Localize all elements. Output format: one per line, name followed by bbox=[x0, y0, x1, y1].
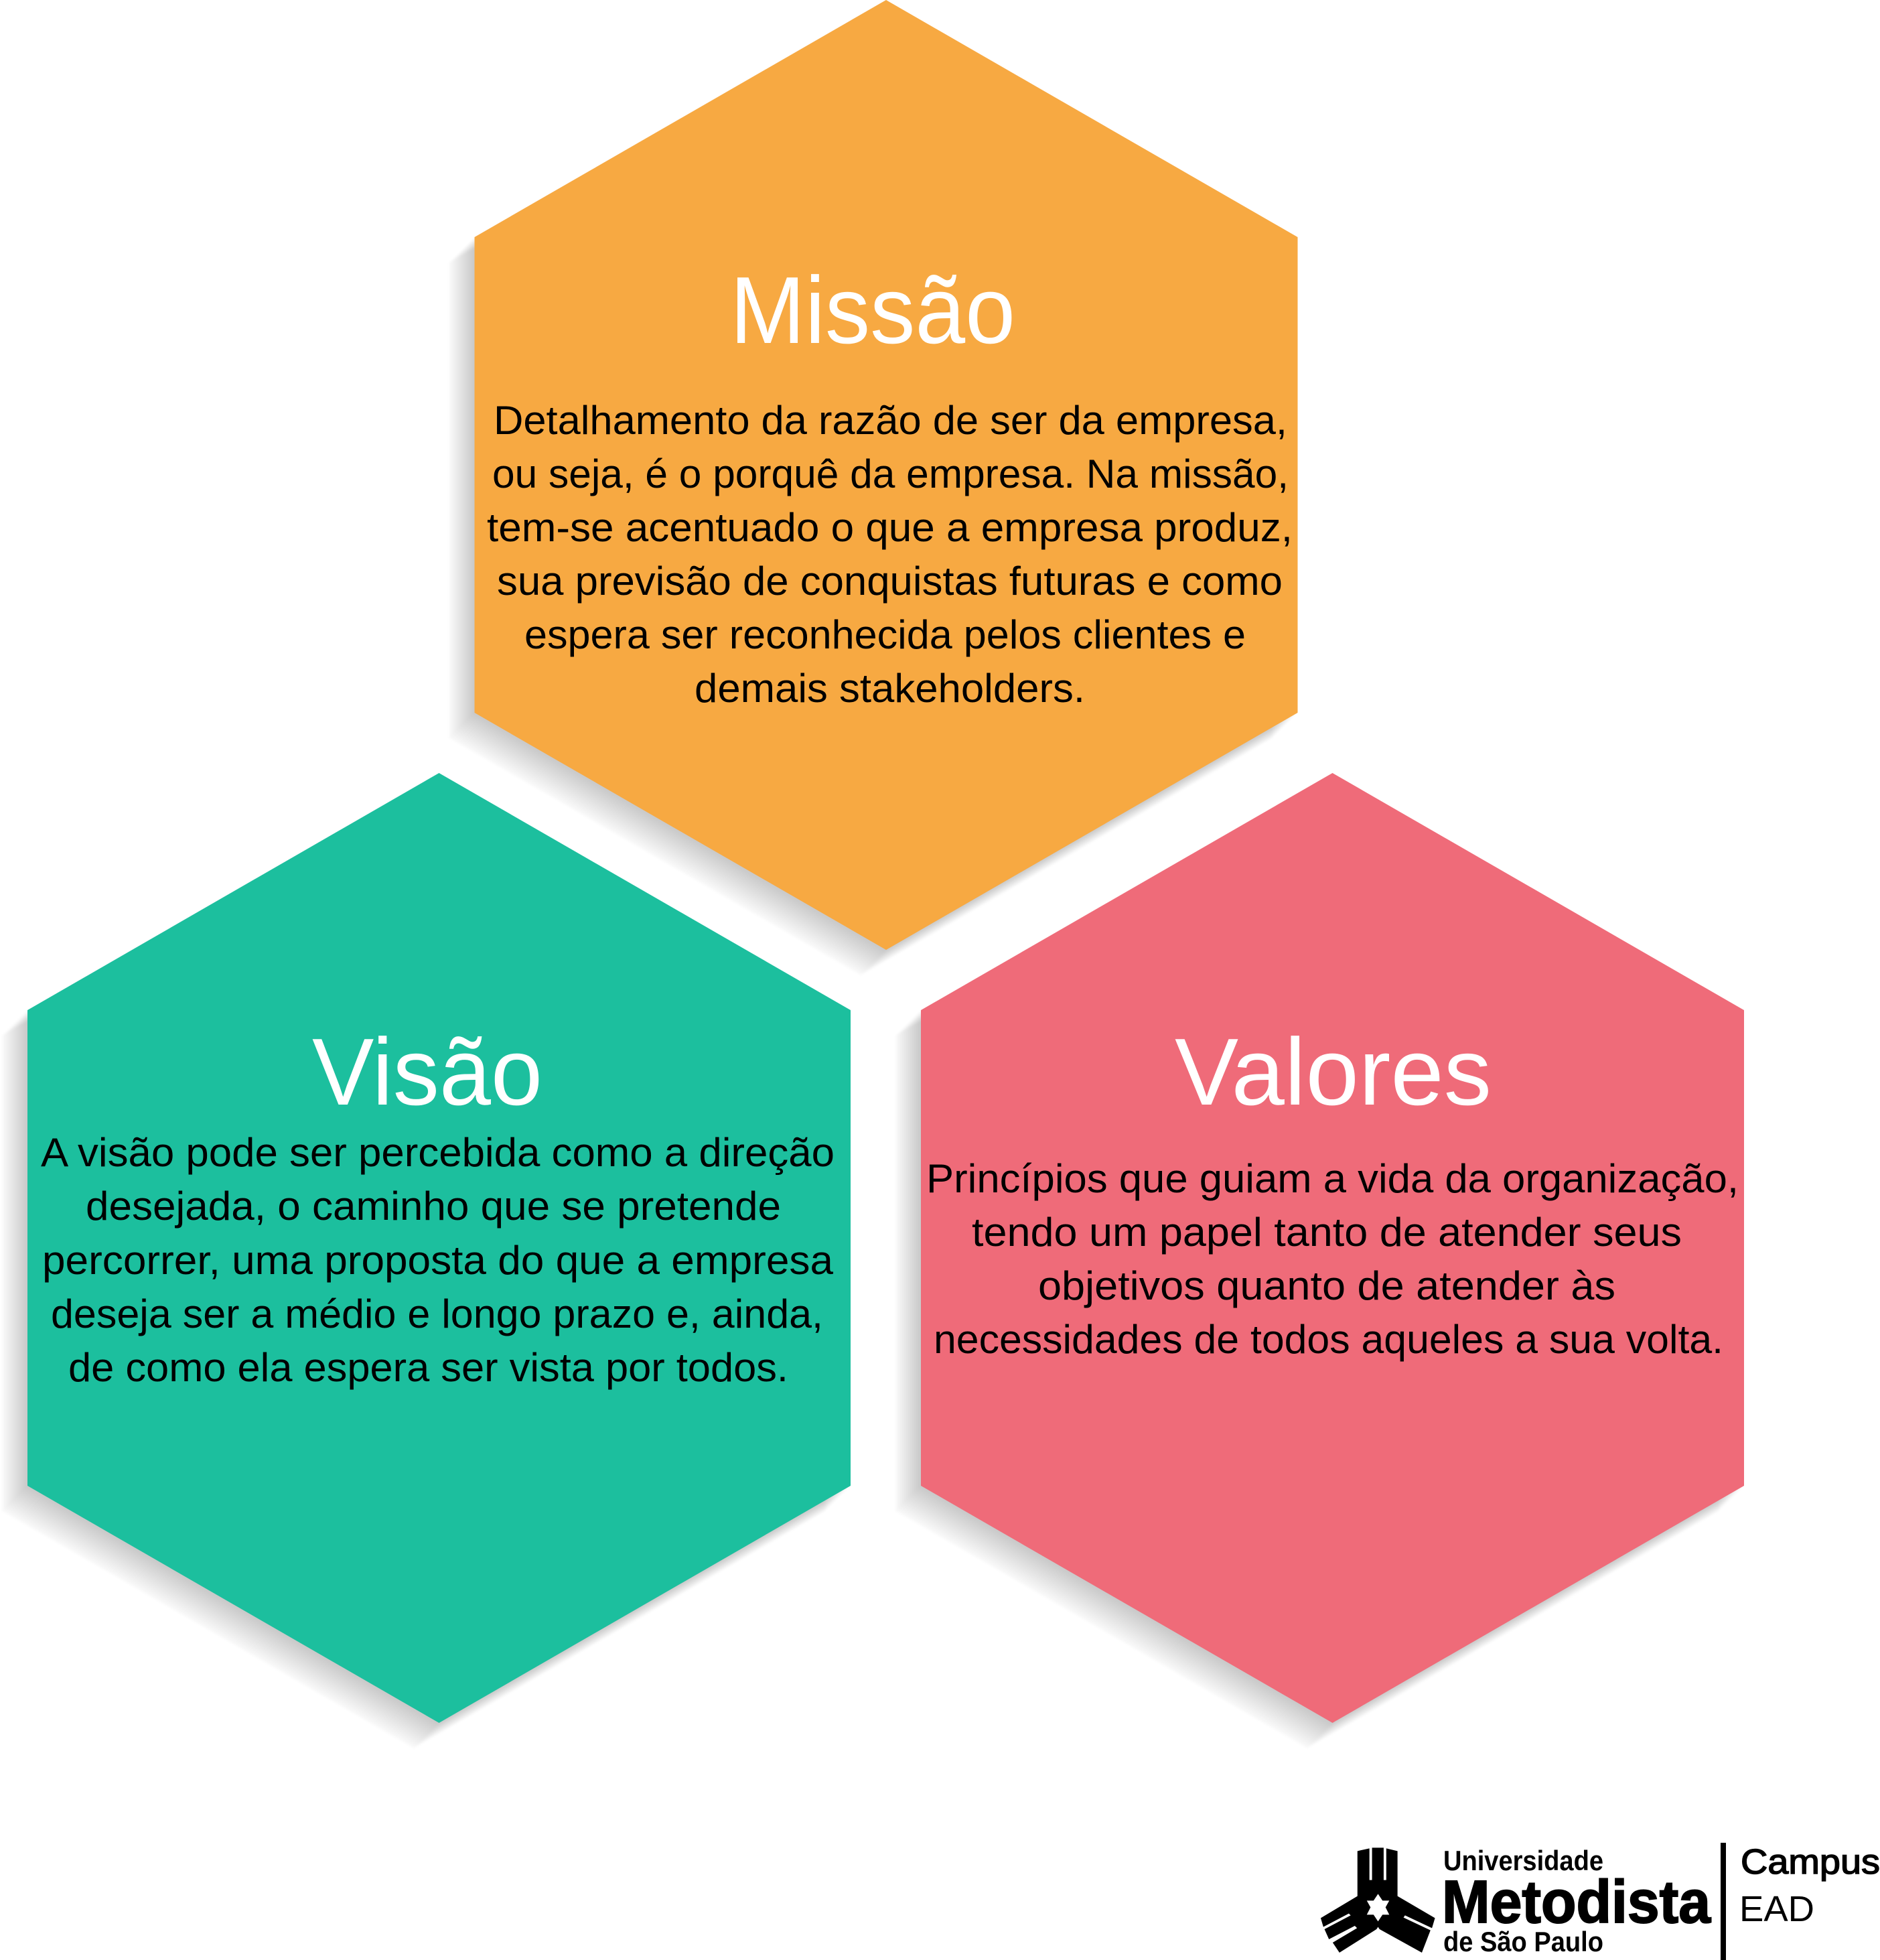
logo: Universidade Metodista de São Paulo, Campus EAD bbox=[1321, 1843, 1880, 1960]
text block: Visão description: desejada, o caminho que se pretende bbox=[86, 1184, 781, 1229]
text block: Valores description: Princípios que guiam a vida da organização, bbox=[926, 1156, 1739, 1201]
hexagon shape: orange bbox=[449, 0, 1298, 975]
text block: Missão description: ou seja, é o porquê da empresa. Na missão, bbox=[492, 451, 1289, 496]
panel: Visão hexagon bbox=[2, 773, 851, 1748]
text block: Valores description: necessidades de todos aqueles a sua volta. bbox=[934, 1317, 1723, 1362]
panel: Missão hexagon bbox=[449, 0, 1298, 975]
text block: Visão description: deseja ser a médio e longo prazo e, ainda, bbox=[51, 1291, 823, 1336]
text block: Missão description bbox=[487, 398, 1293, 711]
text block: Missão description: tem-se acentuado o que a empresa produz, bbox=[487, 505, 1293, 550]
text: Campus: Campus bbox=[1741, 1843, 1880, 1882]
divider bar bbox=[1721, 1843, 1726, 1960]
text block: Visão description: de como ela espera ser vista por todos. bbox=[68, 1345, 788, 1390]
heading: Valores: Valores bbox=[1175, 1019, 1492, 1125]
text block: Valores description: objetivos quanto de atender às bbox=[1038, 1263, 1615, 1308]
text: Metodista: Metodista bbox=[1442, 1869, 1711, 1936]
text block: Missão description: espera ser reconhecida pelos clientes e bbox=[524, 612, 1246, 657]
text: Universidade: Universidade bbox=[1443, 1845, 1603, 1876]
icon: university emblem bbox=[1321, 1847, 1435, 1953]
panel: Valores hexagon bbox=[895, 773, 1744, 1748]
text block: Visão description: A visão pode ser percebida como a direção bbox=[41, 1130, 835, 1175]
heading: Missão: Missão bbox=[730, 257, 1015, 364]
hexagon shape: teal bbox=[2, 773, 851, 1748]
heading: Visão: Visão bbox=[312, 1019, 543, 1125]
text block: Missão description: demais stakeholders. bbox=[695, 666, 1085, 711]
text block: Missão description: Detalhamento da razão de ser da empresa, bbox=[494, 398, 1287, 443]
text block: Visão description: percorrer, uma proposta do que a empresa bbox=[42, 1238, 834, 1283]
text block: Valores description bbox=[926, 1156, 1739, 1362]
text: EAD: EAD bbox=[1739, 1889, 1814, 1929]
text: de São Paulo: de São Paulo bbox=[1443, 1926, 1603, 1957]
text block: Missão description: sua previsão de conquistas futuras e como bbox=[497, 559, 1283, 604]
text block: Visão description bbox=[41, 1130, 835, 1390]
hexagon shape: pink bbox=[895, 773, 1744, 1748]
text block: Valores description: tendo um papel tanto de atender seus bbox=[972, 1210, 1682, 1255]
